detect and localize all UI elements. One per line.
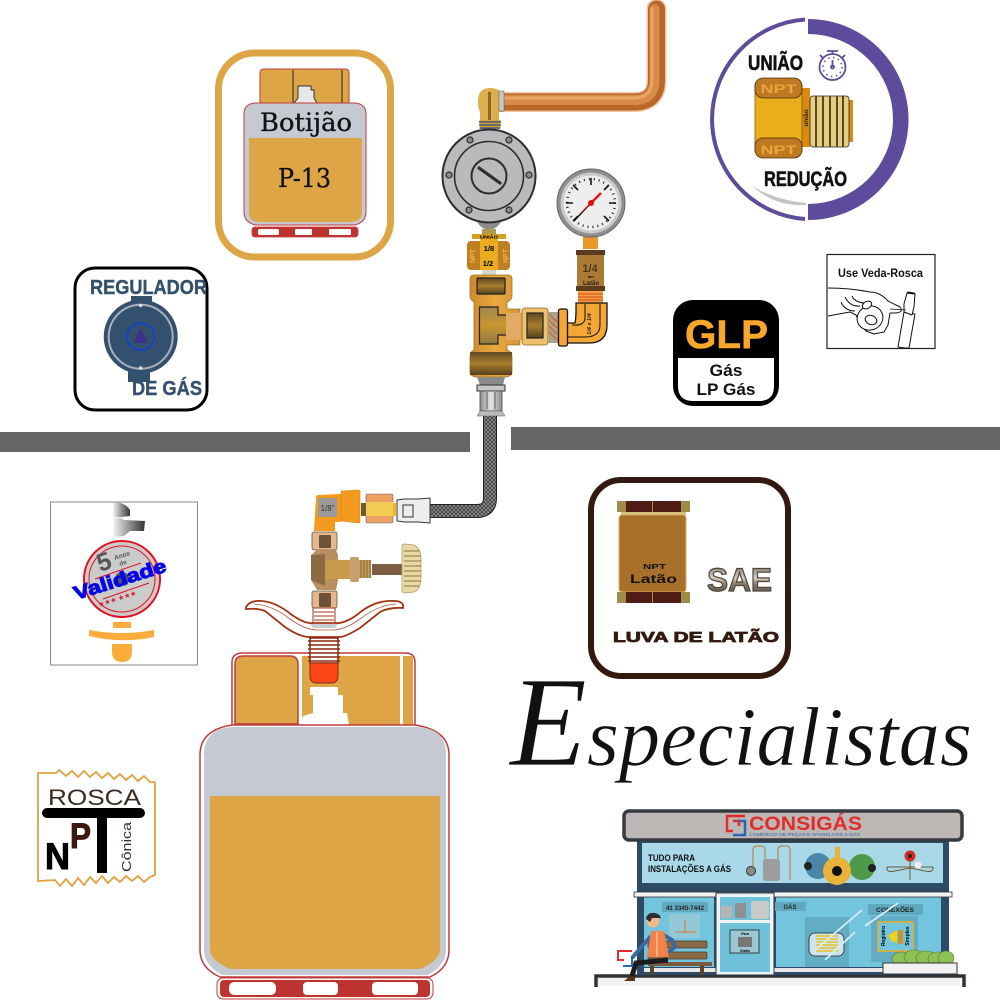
storefront: consigás	[596, 811, 964, 987]
window glare	[815, 903, 898, 960]
N letter: N	[45, 836, 70, 877]
união nut: união	[803, 109, 810, 127]
validity stamp	[71, 541, 169, 617]
consigás subtitle: COMÉRCIO DE PEÇAS E APARELHOS A GÁS	[749, 831, 860, 838]
orange valve silhouette	[89, 622, 154, 662]
SAE label: SAE	[707, 562, 772, 598]
ground floor windows	[637, 895, 949, 975]
window product: registro: Simples	[905, 926, 911, 946]
de gás label: DE GÁS	[132, 377, 202, 400]
brass sleeve icon	[617, 501, 690, 603]
panel: união redução badge	[712, 19, 908, 220]
hand with tape icon	[828, 288, 915, 348]
capacity label: P-13	[278, 164, 331, 194]
união nut	[755, 78, 853, 158]
validity stamp: Anos	[113, 550, 131, 562]
validity stamp: 5	[93, 547, 115, 578]
panel: validade 5 anos	[50, 502, 198, 665]
cylinder valve silhouette	[301, 687, 349, 725]
manifold product	[887, 850, 933, 880]
gas meter product	[746, 846, 790, 881]
union reducer fitting: UNIÃO	[480, 234, 499, 240]
seated man	[624, 913, 675, 981]
regulators product	[804, 847, 876, 885]
pavement	[596, 976, 964, 987]
gás label: Gás	[710, 361, 742, 380]
gás sign	[775, 902, 806, 911]
upper facade	[637, 841, 949, 893]
hose sleeve	[397, 498, 430, 523]
hex nut	[361, 494, 396, 523]
veda-rosca label: Use Veda-Rosca	[838, 268, 924, 280]
luva de latão label: LUVA DE LATÃO	[613, 628, 779, 646]
panel: regulador de gás	[75, 268, 208, 410]
elbow fitting	[478, 88, 504, 129]
small logo	[618, 951, 632, 966]
panel: use veda-rosca	[827, 254, 935, 348]
copper pipe	[504, 9, 656, 102]
hose nut	[477, 377, 505, 416]
valve silhouette	[113, 503, 145, 537]
planter	[883, 950, 957, 974]
window product: registro: Registro	[881, 926, 887, 946]
union reducer fitting: NPT	[503, 248, 510, 263]
one eighth orange elbow: 1/8"	[321, 504, 335, 513]
validity stamp: Validade	[71, 556, 169, 605]
window product: coil	[805, 917, 849, 967]
rosca label: ROSCA	[48, 785, 141, 810]
orange elbow with thread	[558, 303, 607, 346]
sign board	[624, 811, 962, 840]
pressure gauge	[557, 169, 625, 249]
GLP label: GLP	[685, 313, 768, 357]
awning	[634, 892, 952, 897]
consigás brand: CONSIGÁS	[749, 813, 862, 835]
union reducer fitting: 1/8	[484, 244, 494, 253]
badge: rosca NPT cônica	[38, 770, 155, 886]
P letter: P	[70, 817, 91, 856]
one quarter NPT brass sleeve: Latão	[583, 281, 599, 287]
tee valve with knob	[311, 532, 421, 608]
gas regulator	[442, 130, 536, 234]
panel: luva de latão	[591, 480, 788, 676]
union reducer fitting: 1/2	[483, 259, 493, 268]
phone sign	[662, 902, 708, 912]
divider bar left	[0, 432, 470, 452]
LP gás label: LP Gás	[696, 380, 756, 399]
braided hose	[430, 416, 490, 511]
validity stamp: de	[118, 559, 128, 568]
união nut: NPT	[760, 143, 798, 157]
botijão label: Botijão	[260, 108, 352, 137]
brass sleeve icon: NPT	[643, 562, 667, 571]
one quarter NPT brass sleeve: 1/4	[582, 263, 599, 275]
one quarter NPT brass sleeve	[576, 250, 605, 303]
redução heading: REDUÇÃO	[764, 168, 847, 191]
união nut: NPT	[760, 82, 798, 96]
brass sleeve icon: Latão	[630, 572, 677, 586]
badge: GLP	[673, 300, 779, 406]
regulator icon	[104, 296, 178, 382]
cylinder handle	[246, 601, 403, 637]
small cylinder	[244, 69, 366, 237]
threaded valve tip	[308, 638, 340, 683]
door: Para	[741, 932, 749, 936]
instalações text: INSTALAÇÕES A GÁS	[648, 864, 731, 874]
brass tee fitting	[470, 275, 558, 377]
large gas cylinder P-13	[200, 653, 449, 999]
stopwatch icon	[820, 51, 846, 80]
window product: registro	[871, 916, 918, 962]
validity stamp: ★★★ ★★★	[97, 589, 137, 609]
union reducer fitting: NPT	[470, 248, 477, 263]
gás sign: GÁS	[783, 904, 797, 911]
divider bar right	[511, 427, 1000, 450]
one quarter NPT brass sleeve: NPT	[588, 275, 594, 279]
conexões sign	[868, 904, 923, 915]
door: Grátis	[740, 949, 750, 953]
regulador label: REGULADOR	[90, 277, 208, 299]
cônica label: Cônica	[119, 821, 134, 872]
orange elbow with thread: 1/4 x 1/4	[587, 313, 593, 335]
window poster	[669, 914, 700, 938]
one eighth orange elbow	[314, 490, 360, 531]
script heading: especialistas: Especialistas	[508, 651, 972, 793]
bench	[648, 941, 712, 975]
união heading: UNIÃO	[748, 52, 803, 75]
door	[716, 893, 774, 975]
union reducer fitting	[467, 234, 510, 275]
conexões sign: CONEXÕES	[876, 907, 914, 914]
tudo para text: TUDO PARA	[648, 853, 695, 863]
panel: botijão P-13	[218, 53, 390, 257]
phone sign: 41 3345-7442	[666, 905, 704, 912]
